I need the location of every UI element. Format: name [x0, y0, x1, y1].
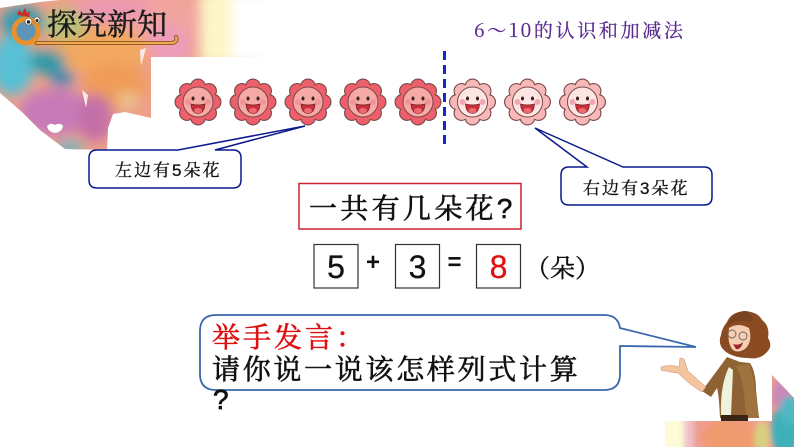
title underline bar	[37, 37, 176, 43]
equals sign: =	[447, 249, 462, 276]
flowers: right group of three	[450, 79, 605, 125]
speech body: 请你说一说该怎样列式计算	[212, 354, 580, 385]
glasses	[728, 330, 747, 340]
number box: 3: 3	[409, 249, 426, 285]
callout: left five flowers	[89, 126, 305, 188]
face	[728, 325, 750, 352]
shirt	[721, 367, 733, 415]
dashed divider	[443, 51, 446, 148]
title banner	[14, 8, 176, 46]
callout: right three flowers: 右边有3朵花	[583, 179, 689, 198]
waist	[721, 415, 748, 421]
background: top-left watercolor	[0, 0, 282, 153]
mascot: Q character	[14, 8, 42, 46]
number box: 8	[476, 244, 520, 288]
plus sign: +	[366, 249, 380, 276]
number box: 3	[396, 244, 440, 288]
jacket	[702, 357, 759, 418]
title text: 探究新知	[47, 9, 167, 42]
hair top	[727, 311, 752, 326]
speech bubble	[200, 315, 696, 415]
number box: 5	[314, 244, 358, 288]
background: bottom-right watercolor	[665, 375, 794, 447]
jacket lapel	[735, 364, 759, 418]
hair back	[720, 311, 770, 358]
arm	[661, 358, 706, 392]
teacher illustration	[661, 311, 770, 421]
flowers: left group of five	[175, 79, 441, 125]
decoration: white spots in watercolor	[47, 48, 146, 133]
subtitle: 6～10的认识和加减法	[474, 16, 684, 43]
number box: 8: 8	[490, 249, 507, 285]
speech question mark: ?	[213, 384, 229, 415]
mouth	[733, 342, 743, 349]
speech heading: 举手发言：	[212, 322, 367, 353]
question box	[299, 184, 521, 229]
callout: right three flowers	[535, 128, 712, 205]
number box: 5: 5	[327, 249, 345, 285]
equation	[314, 244, 600, 288]
unit label: （朵）	[525, 255, 600, 283]
question box: 一共有几朵花?	[309, 193, 516, 224]
callout: left five flowers: 左边有5朵花	[115, 161, 221, 180]
